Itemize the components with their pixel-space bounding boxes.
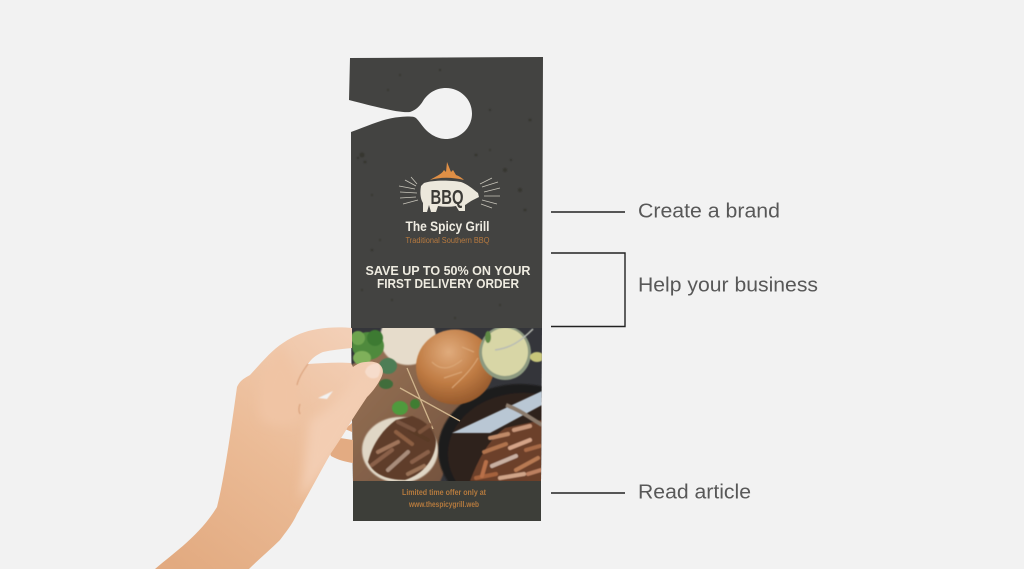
knife (452, 391, 542, 433)
thumbnail (365, 363, 380, 378)
pig body (420, 181, 479, 212)
finger creases (297, 364, 308, 414)
leader line (551, 211, 625, 213)
label: Read article (638, 480, 751, 504)
hand silhouette (155, 327, 383, 569)
cast iron pan (438, 384, 542, 481)
pulled pork right (470, 420, 542, 482)
callout: help your business (551, 253, 818, 326)
brand name: The Spicy Grill (406, 218, 490, 234)
card dark upper panel (349, 57, 543, 329)
pulled pork left (368, 416, 436, 480)
card footer band (353, 481, 541, 521)
BBQ lettering: BBQ (430, 187, 464, 209)
skewers (400, 368, 460, 429)
hand holding card (155, 327, 383, 569)
bracket (551, 253, 625, 326)
door hanger card (349, 57, 543, 521)
wooden board (352, 350, 462, 481)
sandwich bread (362, 417, 438, 483)
label: Create a brand (638, 200, 780, 222)
hand shading (296, 364, 378, 494)
salad greens (351, 330, 420, 415)
logo: pig with flame (399, 162, 500, 212)
offer headline (366, 263, 531, 291)
footer url: www.thespicygrill.web (408, 500, 479, 509)
card speckle texture (357, 69, 532, 319)
rays (399, 177, 500, 208)
offer headline: SAVE UP TO 50% ON YOUR (366, 263, 531, 278)
food photo (351, 328, 542, 481)
footer offer text: Limited time offer only at (402, 488, 486, 497)
flame (430, 162, 464, 180)
hamburger bun (416, 330, 494, 404)
little finger behind card (330, 423, 353, 463)
tagline: Traditional Southern BBQ (406, 236, 490, 245)
gap between fingers (318, 391, 333, 399)
sauce jar (479, 326, 544, 380)
open bun top (380, 328, 436, 366)
label: Help your business (638, 274, 818, 296)
infographic canvas (155, 57, 818, 569)
offer headline: FIRST DELIVERY ORDER (377, 276, 520, 291)
leader line (551, 492, 625, 494)
